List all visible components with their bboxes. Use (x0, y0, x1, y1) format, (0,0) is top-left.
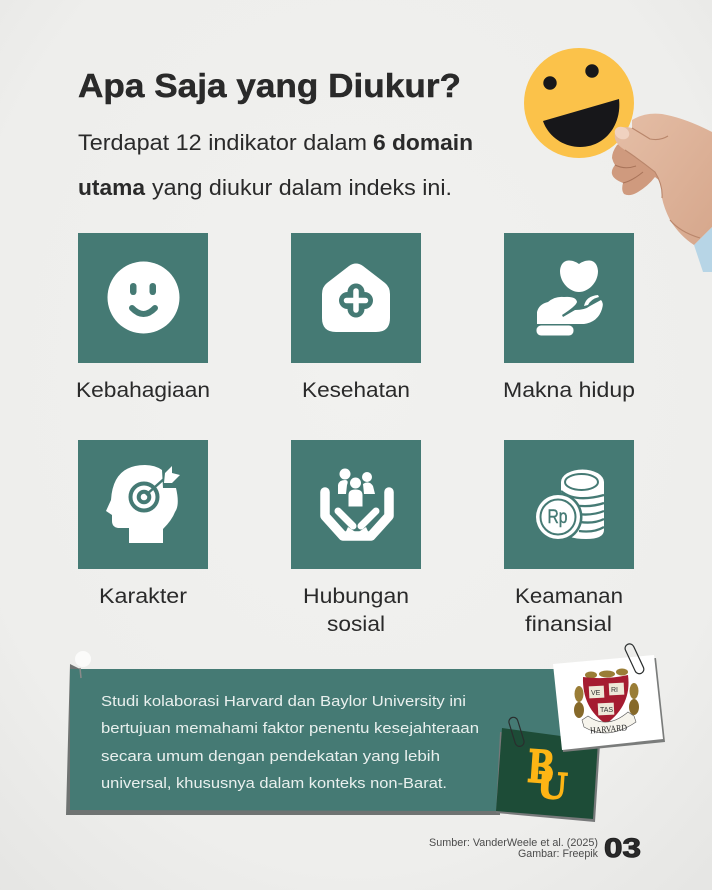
icon: smiling face (108, 262, 180, 334)
intro text (78, 130, 473, 200)
intro text: yang diukur dalam indeks ini. (152, 175, 452, 200)
icon: paper clip (508, 716, 525, 748)
Harvard crest (574, 668, 639, 736)
icon: health house (322, 264, 390, 332)
ribbon (582, 712, 636, 733)
tile (78, 233, 208, 363)
callout panel (66, 664, 562, 815)
Baylor BU mark: U (536, 764, 569, 808)
icon: push pin (75, 651, 91, 678)
callout text: universal, khususnya dalam konteks non-Barat. (101, 775, 447, 792)
label: Kesehatan (302, 379, 410, 402)
note: Harvard logo (553, 642, 665, 752)
tile (78, 440, 208, 569)
note shadow (556, 658, 665, 752)
icon: head with target (106, 465, 180, 543)
books: TAS (600, 707, 613, 714)
panel shadow (66, 664, 500, 815)
wreath (574, 668, 639, 718)
panel: Keamanan finansial (504, 440, 634, 636)
icon: rupiah coins (534, 470, 604, 542)
intro text: Terdapat 12 indikator dalam (78, 130, 367, 155)
illustration: hand holding smiley (524, 48, 712, 272)
icon: yellow smiley (524, 48, 634, 158)
note shadow (496, 732, 600, 822)
callout text: Studi kolaborasi Harvard dan Baylor University ini (101, 693, 466, 710)
note paper (496, 728, 598, 819)
note: Baylor logo (496, 716, 600, 822)
label: Kebahagiaan (76, 379, 210, 402)
back of hand and thumb (615, 114, 712, 245)
callout text: secara umum dengan pendekatan yang lebih (101, 748, 440, 765)
label: Hubungan (303, 585, 409, 608)
panel: Kesehatan (291, 233, 421, 402)
label: finansial (525, 613, 612, 636)
panel: Hubungan sosial (291, 440, 421, 636)
label: Keamanan (515, 585, 623, 608)
label: sosial (327, 613, 385, 636)
source credit (429, 837, 598, 860)
source credit: Sumber: VanderWeele et al. (2025) (429, 837, 598, 849)
label: Makna hidup (503, 379, 635, 402)
panel: Makna hidup (503, 233, 635, 402)
page number: 03 (604, 833, 641, 863)
Baylor BU mark: B (526, 740, 556, 794)
intro text: 6 domain (373, 130, 473, 155)
icon: hands holding people (325, 468, 389, 540)
fingers (612, 140, 665, 195)
label (515, 585, 623, 636)
callout text (101, 693, 479, 792)
books (589, 683, 624, 715)
icon: shirt cuff (694, 227, 712, 272)
title: Apa Saja yang Diukur? (78, 67, 461, 104)
icon: rupiah coins: Rp (548, 507, 568, 528)
books: VE (591, 690, 601, 697)
icon: paper clip (624, 642, 645, 675)
icon: hand (612, 114, 712, 245)
callout text: bertujuan memahami faktor penentu kesejahteraan (101, 720, 479, 737)
tile (504, 233, 634, 363)
panel: Karakter (78, 440, 208, 608)
panel body (70, 669, 562, 811)
label (303, 585, 409, 636)
tile (504, 440, 634, 569)
note paper (553, 655, 663, 750)
panel: Kebahagiaan (76, 233, 210, 402)
tile (291, 440, 421, 569)
tile (291, 233, 421, 363)
icon: heart in hand (536, 261, 603, 336)
books: RI (611, 687, 618, 694)
shield (583, 675, 629, 724)
Harvard crest: HARVARD (590, 722, 628, 736)
label: Karakter (99, 585, 187, 608)
source credit: Gambar: Freepik (518, 848, 598, 860)
intro text: utama (78, 175, 146, 200)
